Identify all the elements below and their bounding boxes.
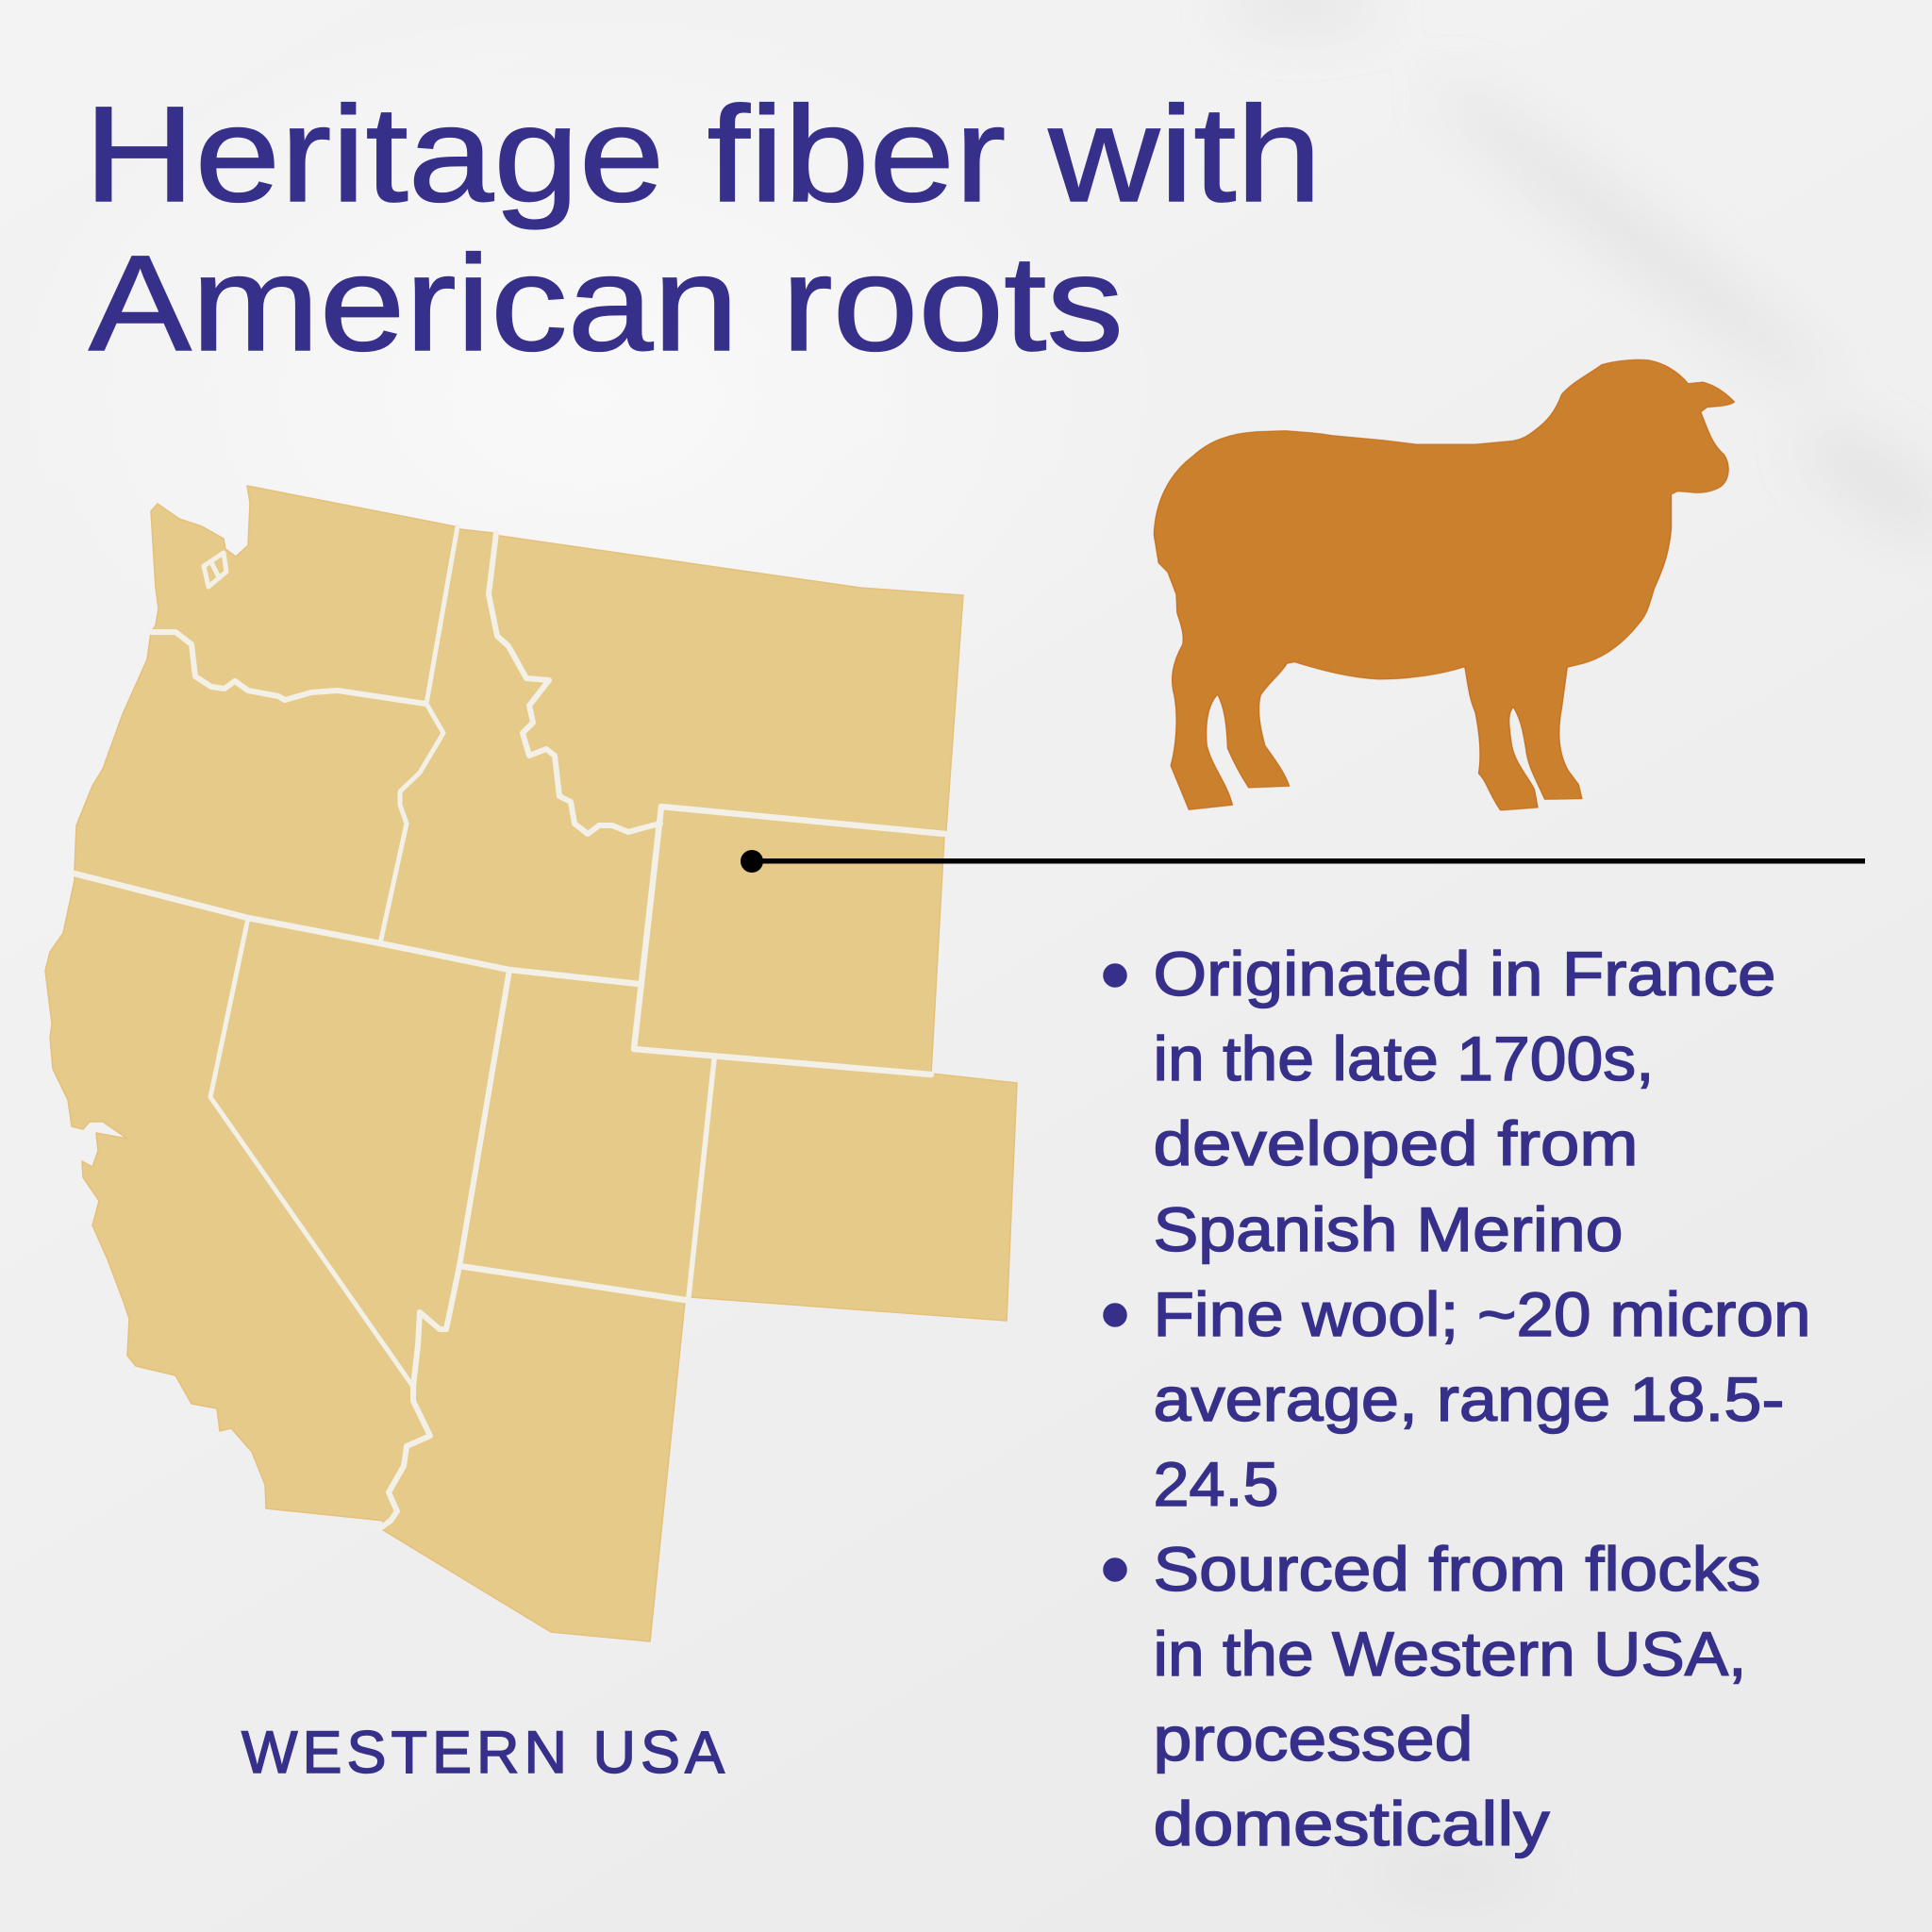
- title line 2: American roots: [89, 227, 1124, 379]
- bullet 1: developed from: [1153, 1108, 1638, 1178]
- bullet 3: in the Western USA,: [1153, 1619, 1747, 1689]
- title line 1: Heritage fiber with: [84, 78, 1322, 230]
- bullet 1: Originated in France: [1153, 939, 1775, 1008]
- icon: sheep silhouette: [1154, 359, 1734, 810]
- bullet 2: [1104, 1279, 1811, 1519]
- map: western USA: [45, 486, 1017, 1641]
- bullet 1: Spanish Merino: [1153, 1194, 1623, 1264]
- map silhouette: [45, 486, 1017, 1641]
- state borders: [75, 526, 945, 1528]
- bullet 2: average, range 18.5-: [1153, 1364, 1785, 1434]
- map label: WESTERN USA: [242, 1720, 724, 1786]
- bullet 2: 24.5: [1153, 1449, 1279, 1519]
- bullet list: [1104, 939, 1811, 1858]
- bullet 3: domestically: [1153, 1789, 1549, 1858]
- bullet 3: Sourced from flocks: [1153, 1534, 1760, 1604]
- bullet 1: in the late 1700s,: [1153, 1024, 1655, 1093]
- bullet 1: [1104, 939, 1775, 1264]
- bullet 3: [1104, 1534, 1760, 1858]
- bullet 2: Fine wool; ~20 micron: [1153, 1279, 1811, 1349]
- bullet 3: processed: [1153, 1704, 1474, 1774]
- leader line from map to text: [741, 850, 1865, 873]
- title: [84, 78, 1322, 379]
